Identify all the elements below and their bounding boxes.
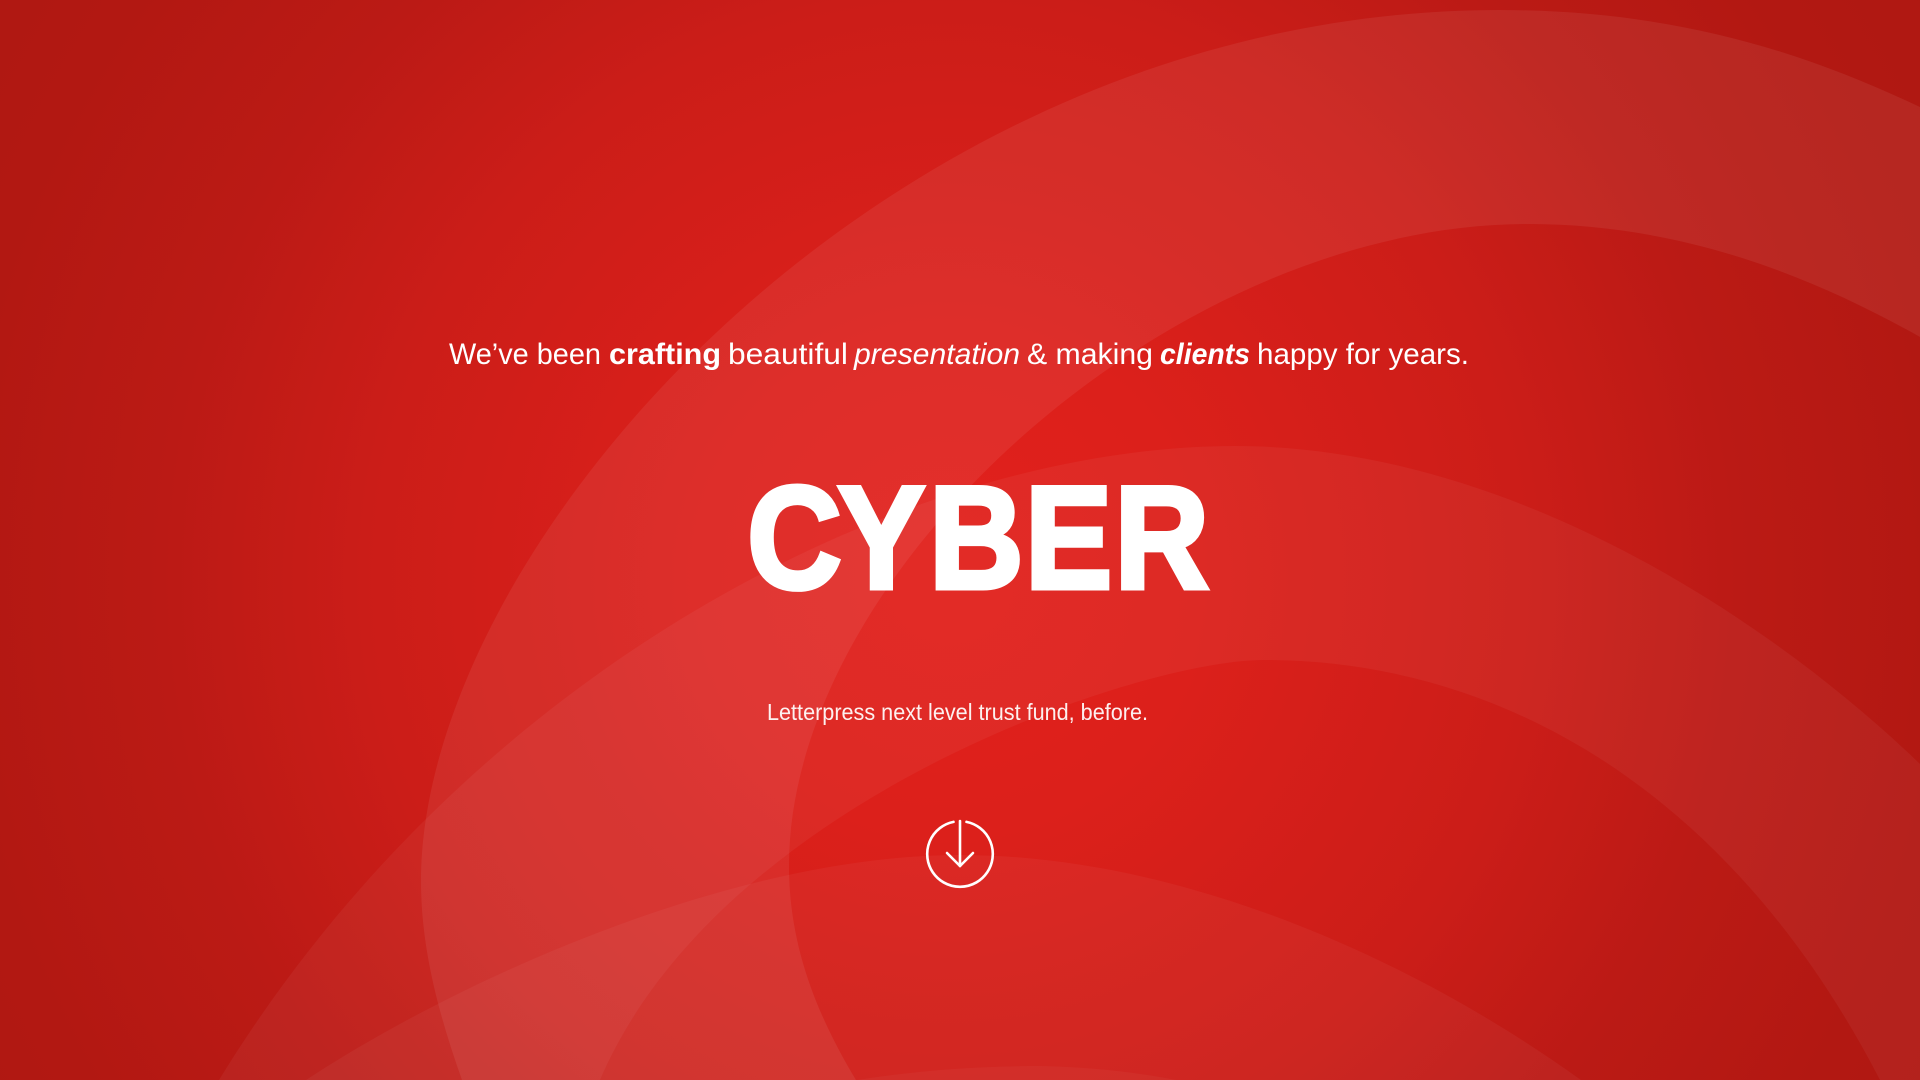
swoosh: upper ring bbox=[421, 10, 1920, 1080]
swoosh: middle ring bbox=[219, 446, 1920, 1080]
tagline: crafting bbox=[609, 338, 721, 371]
tagline: beautiful bbox=[728, 338, 848, 371]
tagline: clients bbox=[1160, 338, 1250, 371]
title: CYBER bbox=[747, 457, 1209, 620]
icon: down arrow in circle bbox=[927, 821, 993, 887]
tagline: We’ve been bbox=[449, 338, 601, 371]
tagline: presentation bbox=[853, 338, 1020, 371]
tagline: happy for years. bbox=[1257, 338, 1469, 371]
swoosh: lower arch bbox=[306, 855, 1581, 1080]
subtitle: Letterpress next level trust fund, before. bbox=[767, 699, 1148, 725]
swoosh: small bottom arch bbox=[857, 1066, 1176, 1080]
tagline bbox=[449, 338, 1469, 371]
tagline: & making bbox=[1027, 338, 1153, 371]
